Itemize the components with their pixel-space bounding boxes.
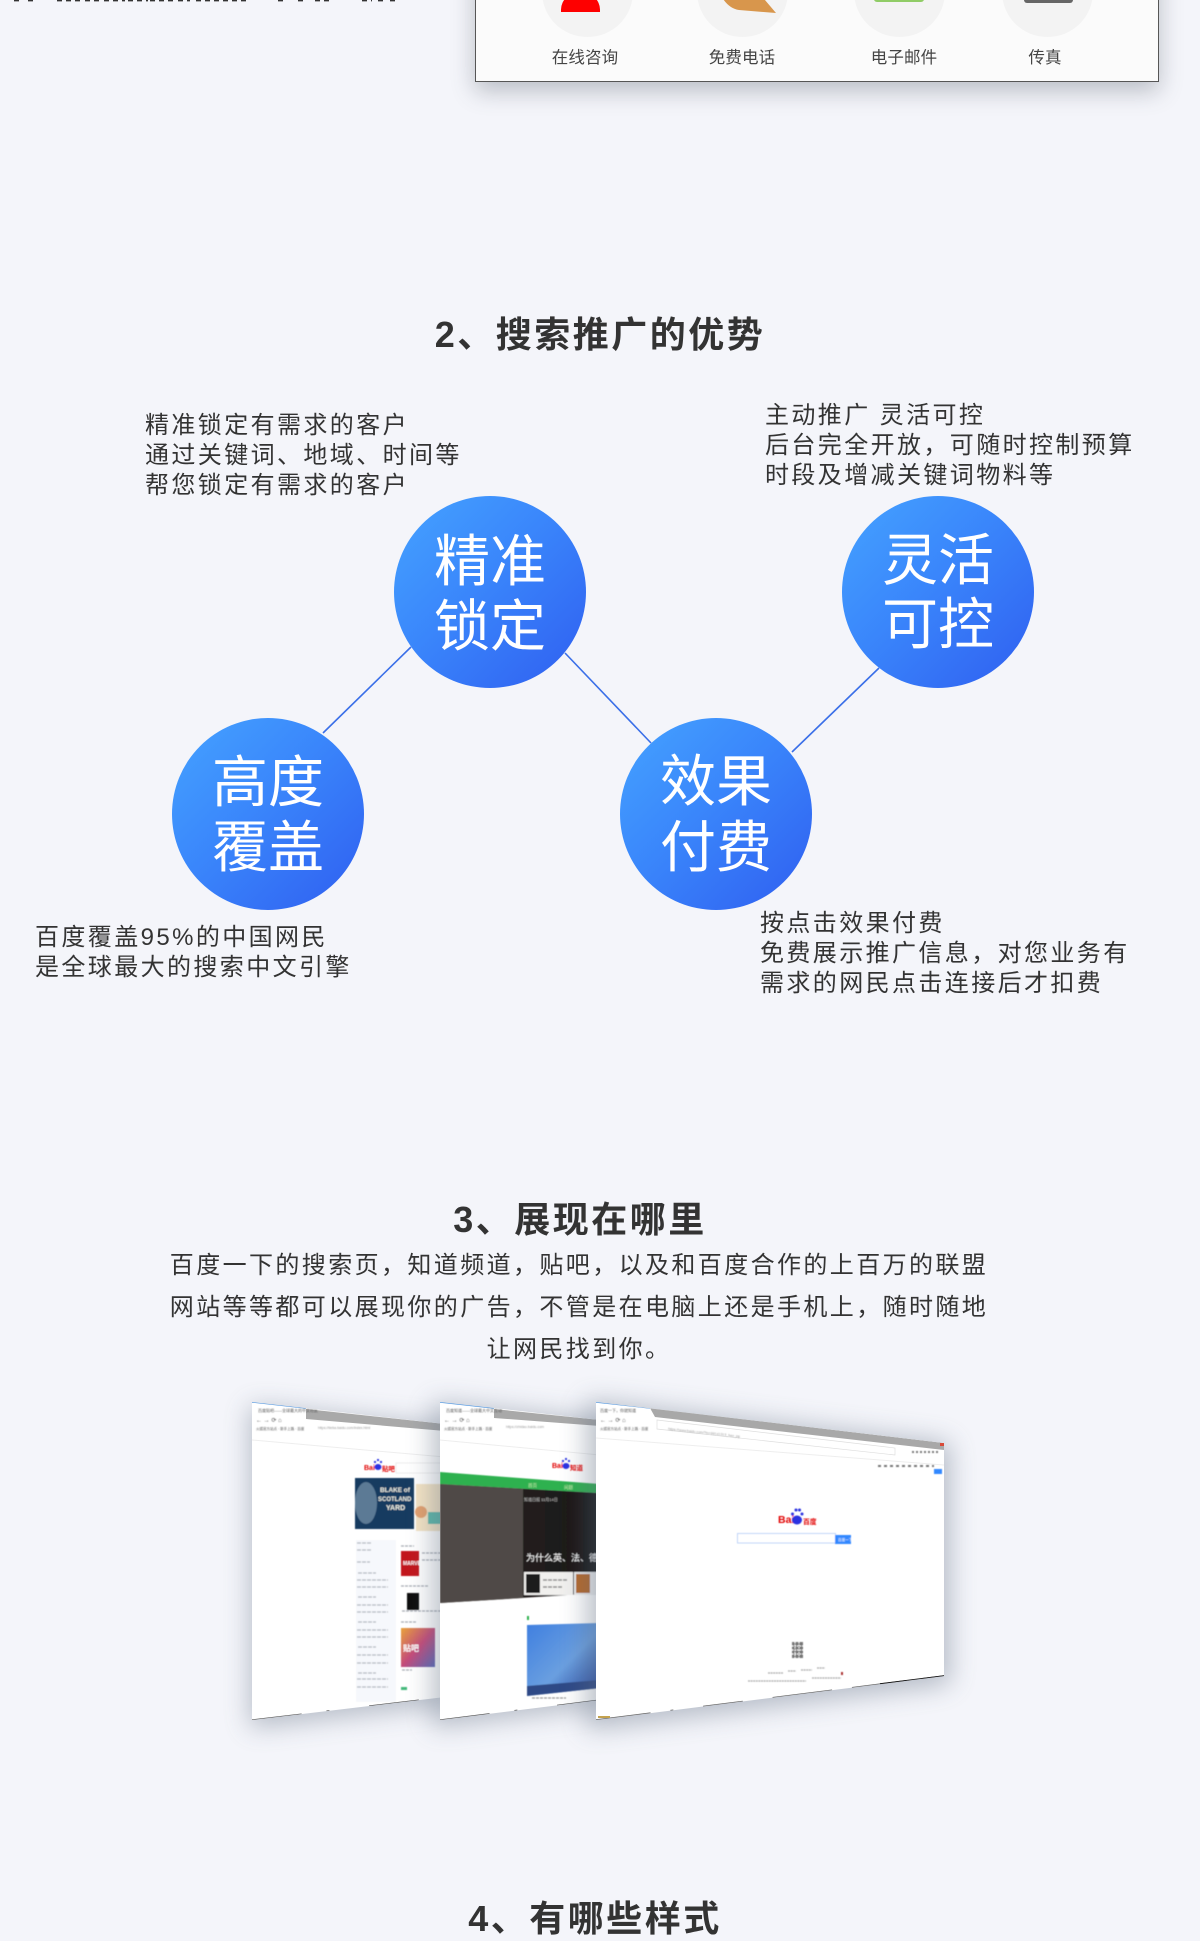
circle: pay per result: 付费 — [660, 816, 772, 879]
text: pay per result: 免费展示推广信息，对您业务有 — [760, 940, 1130, 967]
screenshot: Baidu home page: Bai — [778, 1514, 794, 1526]
text: high coverage: 是全球最大的搜索中文引擎 — [35, 954, 352, 981]
screenshot: Zhidao page — [432, 1400, 607, 1730]
text: high coverage — [35, 924, 352, 981]
screenshot: Tieba page: BLAKE of — [380, 1487, 411, 1494]
text: pay per result: 需求的网民点击连接后才扣费 — [760, 970, 1103, 997]
text: flexible control: 时段及增减关键词物料等 — [765, 462, 1055, 489]
text: precise targeting: 帮您锁定有需求的客户 — [145, 472, 409, 499]
panel: contact options card — [475, 0, 1159, 82]
circle: pay per result: 效果 — [660, 750, 772, 813]
screenshot: Baidu home page: ← → ⟳ ⌂ — [600, 1418, 626, 1424]
heading: section 2: 2、搜索推广的优势 — [435, 314, 765, 355]
text: where ads appear: 百度一下的搜索页，知道频道，贴吧，以及和百度合作的上百万的联盟 — [170, 1252, 988, 1279]
screenshot: Baidu home page: 百度一下 — [838, 1537, 853, 1542]
screenshot: Tieba page: Bai — [364, 1465, 375, 1472]
screenshot: Zhidao page: ← → ⟳ ⌂ — [444, 1418, 470, 1424]
screenshot: Zhidao page: https://zhidao.baidu.com — [506, 1425, 544, 1429]
cropped text remnant at top left — [14, 0, 395, 2]
label: fax: 传真 — [1028, 49, 1062, 67]
text: where ads appear: 让网民找到你。 — [487, 1336, 671, 1363]
circle: high coverage: 高度 — [212, 751, 324, 814]
label: online consult: 在线咨询 — [552, 49, 618, 67]
screenshot: Tieba page: SCOTLAND — [378, 1497, 412, 1503]
screenshot: Baidu home page: 火狐官方站点 · 新手上路 · 百度 — [600, 1426, 649, 1431]
circle: high coverage — [172, 718, 364, 910]
heading: section 4: 4、有哪些样式 — [468, 1898, 722, 1939]
screenshot: Zhidao page: 知道 — [570, 1463, 584, 1472]
screenshot: Tieba page: 火狐官方站点 · 新手上路 · 百度 — [256, 1426, 305, 1431]
screenshot: Zhidao page: 为什么英、法、德、 — [526, 1552, 607, 1563]
screenshot: Zhidao page: 知道日报 11月14日 — [524, 1496, 558, 1502]
connector lines between advantage circles — [322, 646, 880, 753]
circle: flexible control: 灵活 — [882, 529, 994, 592]
screenshot: Tieba page — [250, 1400, 450, 1730]
screenshot: Zhidao page: 问题 — [564, 1484, 573, 1491]
circle: pay per result — [620, 718, 812, 910]
icon: online consult — [542, 0, 633, 37]
screenshot: Tieba page: ← → ⟳ ⌂ — [256, 1418, 282, 1424]
label: free phone: 免费电话 — [709, 49, 775, 67]
circle: precise targeting: 精准 — [434, 530, 546, 593]
text: where ads appear: 网站等等都可以展现你的广告，不管是在电脑上还是手机上，随时随地 — [170, 1294, 988, 1321]
label: email: 电子邮件 — [871, 49, 937, 67]
text: precise targeting: 精准锁定有需求的客户 — [145, 412, 409, 439]
screenshot: Baidu home page: 百度 — [803, 1517, 817, 1526]
circle: flexible control — [842, 496, 1034, 688]
icon: email — [854, 0, 945, 37]
screenshot: Zhidao page: Bai — [552, 1463, 563, 1470]
screenshot: Zhidao page: 百度知道——全球最大中文互动 — [446, 1407, 502, 1413]
heading: section 3: 3、展现在哪里 — [453, 1199, 707, 1240]
screenshot: Tieba page: MARVEL — [403, 1561, 424, 1567]
text: flexible control: 主动推广 灵活可控 — [765, 402, 985, 429]
text: high coverage: 百度覆盖95%的中国网民 — [35, 924, 328, 951]
screenshot: Tieba page: 贴吧 — [382, 1464, 396, 1473]
text: where ads appear — [170, 1252, 988, 1363]
screenshot: Zhidao page: 首页 — [528, 1482, 537, 1489]
screenshot: Baidu home page: 百度一下，你就知道 — [600, 1407, 636, 1413]
text: precise targeting — [145, 412, 462, 499]
circle: high coverage: 覆盖 — [212, 816, 324, 879]
text: flexible control — [765, 402, 1135, 489]
screenshot: Tieba page: https://tieba.baidu.com/index.html — [318, 1426, 370, 1430]
screenshot: Tieba page: 贴吧 — [403, 1643, 419, 1653]
text: pay per result — [760, 910, 1130, 997]
circle: precise targeting: 锁定 — [434, 595, 546, 658]
screenshot: Baidu home page — [586, 1400, 950, 1730]
illustration: three browser screenshots in perspective — [236, 1389, 964, 1740]
screenshot: Tieba page: 百度贴吧——全球最大的中文社区 — [258, 1407, 318, 1413]
text: precise targeting: 通过关键词、地域、时间等 — [145, 442, 462, 469]
circle: precise targeting — [394, 496, 586, 688]
screenshot: Tieba page: YARD — [386, 1505, 405, 1512]
screenshot: Zhidao page: 火狐官方站点 · 新手上路 · 百度 — [444, 1426, 493, 1431]
icon: fax — [1002, 0, 1093, 37]
icon: free phone — [697, 0, 788, 37]
text: pay per result: 按点击效果付费 — [760, 910, 945, 937]
screenshot: Baidu home page: https://www.baidu.com/?tn=99141313_hao_pg — [668, 1427, 740, 1439]
circle: flexible control: 可控 — [882, 593, 994, 656]
text: flexible control: 后台完全开放，可随时控制预算 — [765, 432, 1135, 459]
